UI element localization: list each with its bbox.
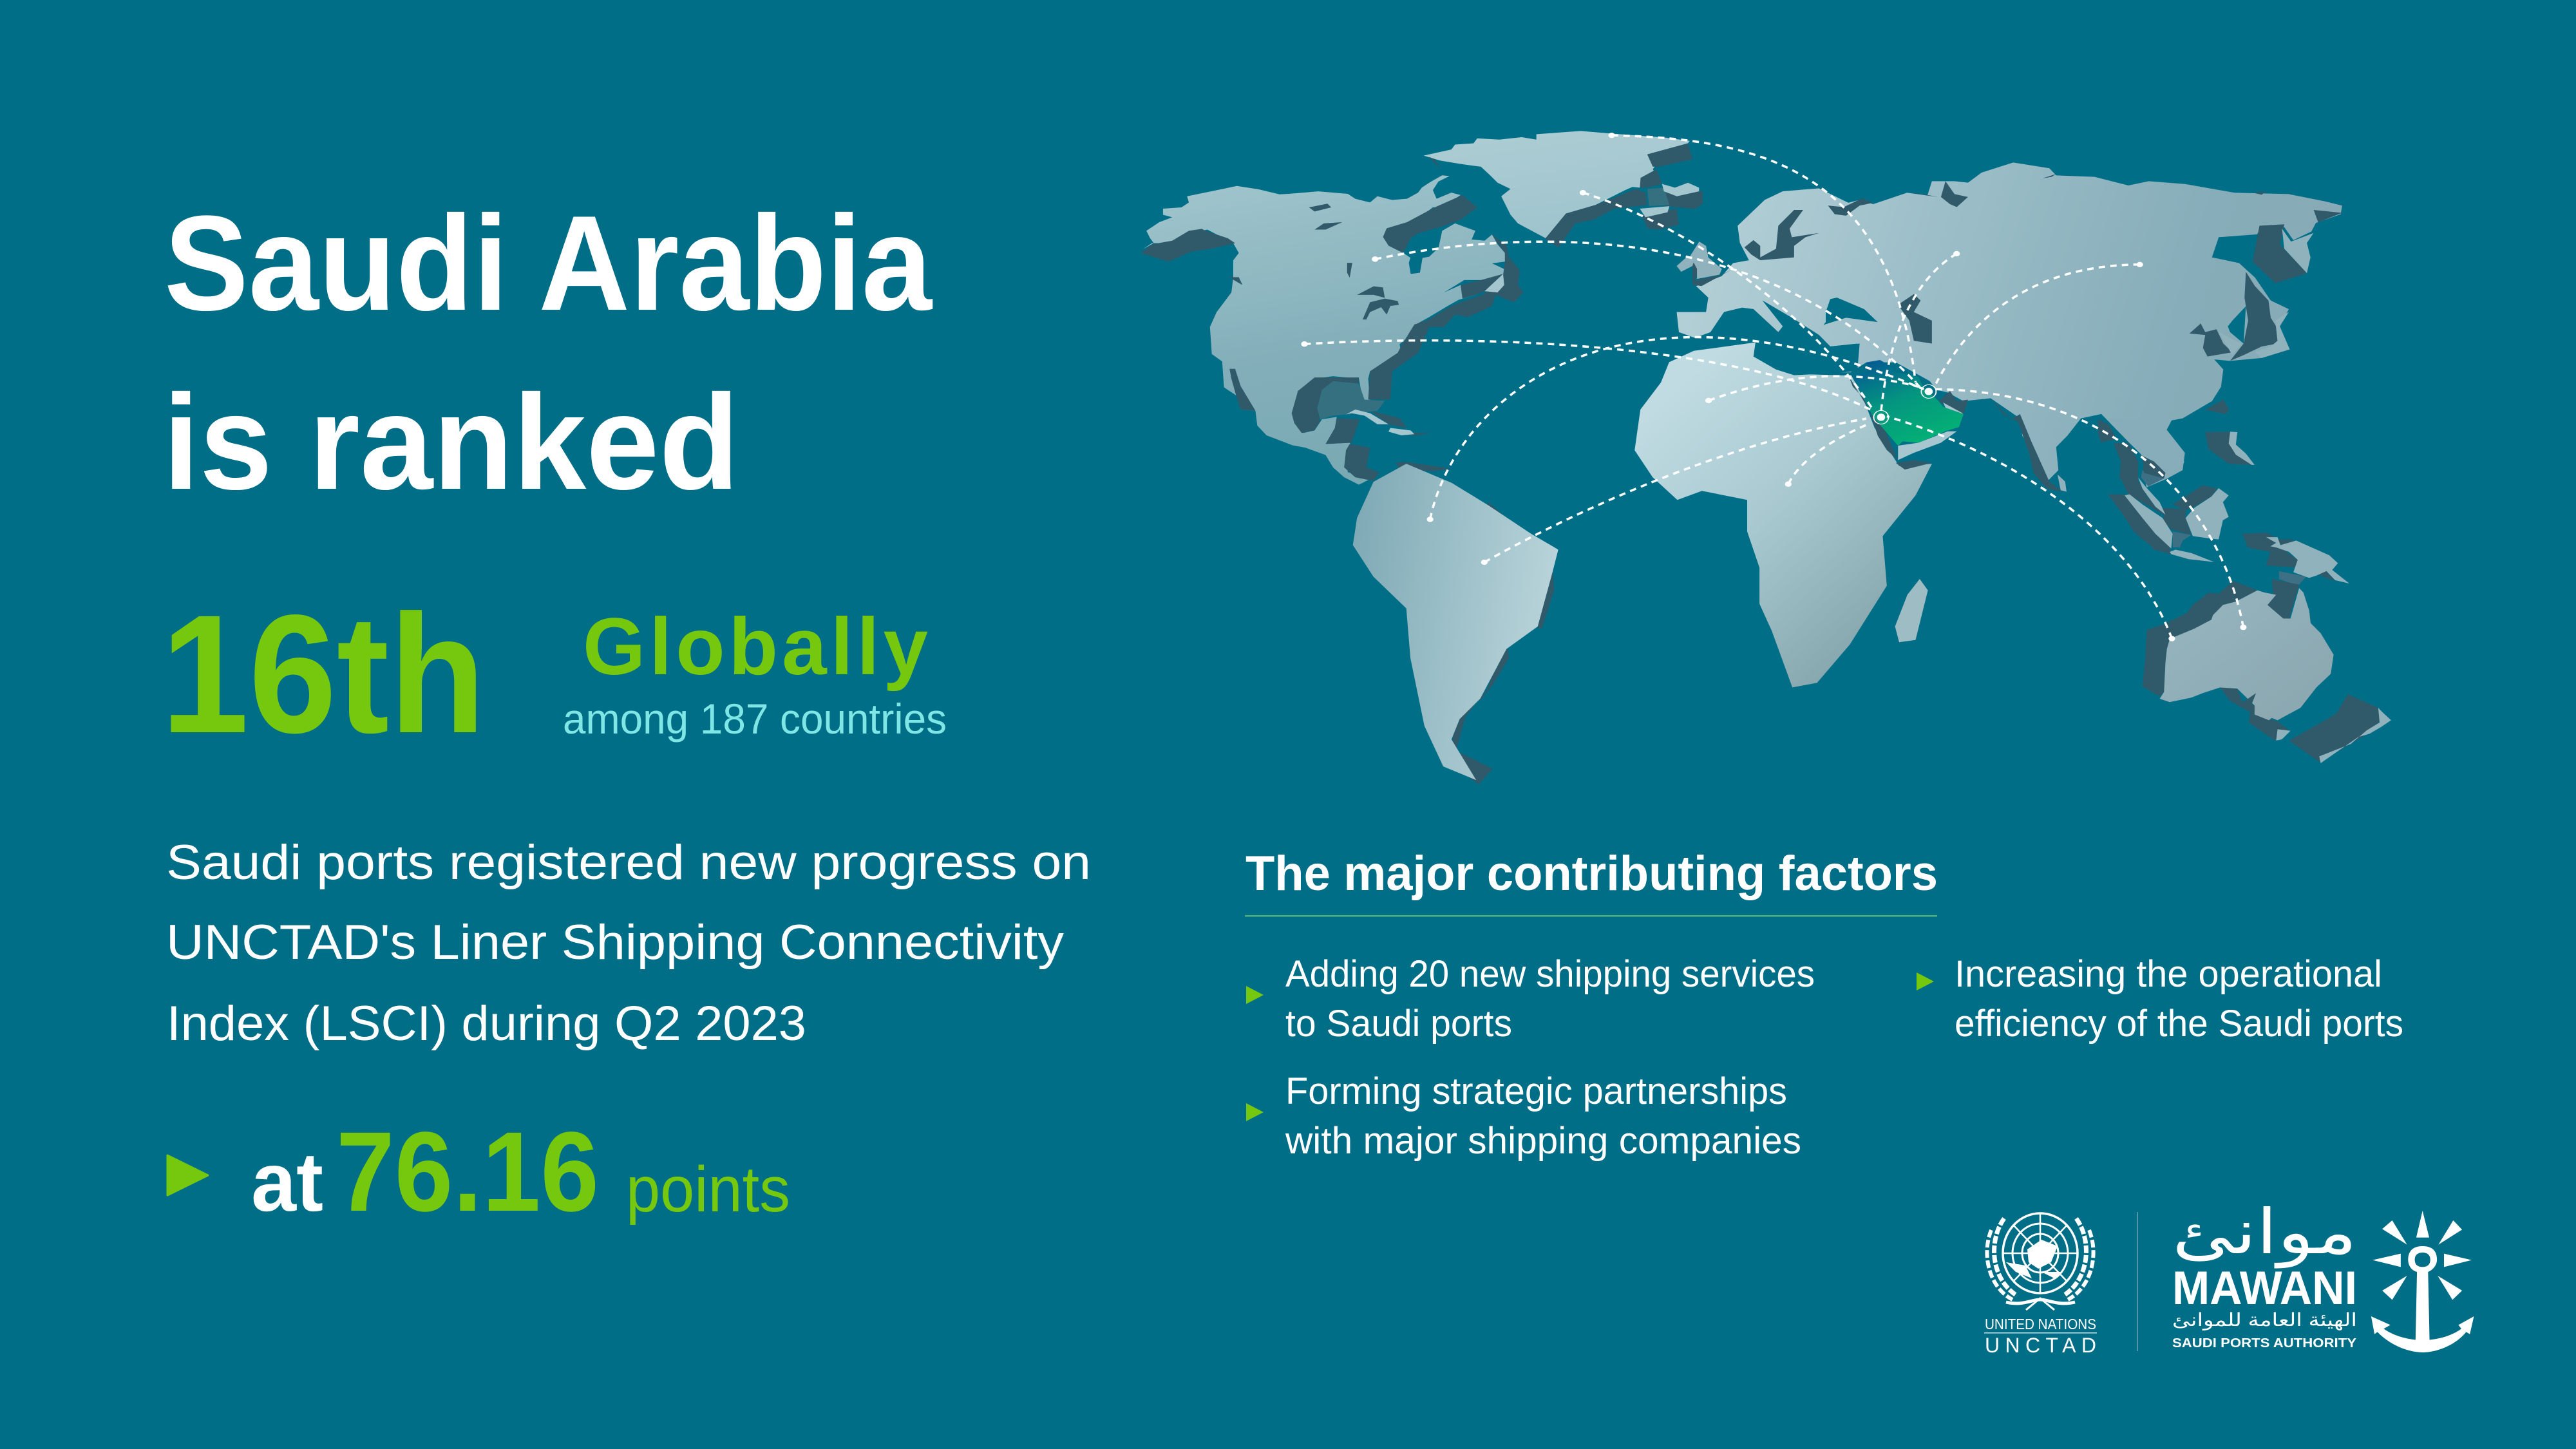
factor: strategic partnerships: with major shipping companies	[1285, 1120, 1801, 1162]
score line	[167, 1109, 790, 1235]
logo: UNCTAD: UNITED NATIONS	[1985, 1316, 2096, 1332]
port hub: jeddah	[1873, 410, 1888, 424]
description paragraph	[166, 835, 1091, 1051]
land: kamchatka, korea, japan, britain	[1677, 229, 2314, 491]
factor: new shipping services	[1246, 953, 1815, 1045]
description paragraph: Index (LSCI) during Q2 2023	[167, 996, 806, 1051]
extrusion shadows: north atlantic and gulf	[1141, 144, 1703, 481]
land: south america	[1353, 464, 1558, 780]
sea of okhotsk and japan	[2212, 236, 2257, 344]
map region: eurasia	[1677, 162, 2342, 491]
logo: Mawani	[2172, 1198, 2474, 1352]
land: arabia south, kamchatka and islands	[1898, 402, 1963, 460]
land: greenland	[1424, 131, 1690, 238]
globally label: among 187 countries	[563, 695, 947, 743]
land: madagascar	[1895, 579, 1928, 642]
extrusion shadows: south america	[1452, 502, 1554, 784]
map overlay: routes and ports	[1301, 133, 2247, 641]
land: north america	[1142, 175, 1507, 485]
land: africa	[1634, 342, 1932, 687]
land: caribbean islands, iceland	[1346, 183, 1699, 435]
icon: UN emblem	[1987, 1213, 2094, 1310]
logo: Mawani: MAWANI	[2172, 1262, 2357, 1314]
title	[163, 187, 933, 518]
globally label: Globally	[583, 602, 928, 692]
map region: south east asia and oceania	[2098, 419, 2391, 763]
logo: Mawani: SAUDI PORTS AUTHORITY	[2172, 1336, 2357, 1350]
extrusion shadows: asia	[1692, 174, 2342, 491]
icon: arrow marker	[167, 1155, 208, 1195]
shipping routes	[1305, 135, 2243, 639]
score line: at	[251, 1135, 323, 1229]
description paragraph: Saudi ports registered new progress on	[166, 835, 1091, 890]
factor: strategic partnerships	[1246, 1070, 1801, 1162]
score line: 76.16	[336, 1109, 599, 1235]
land: australia	[2160, 588, 2334, 720]
score line: points	[626, 1153, 790, 1226]
hudson and james bay	[1403, 223, 1455, 274]
route end points	[1301, 133, 2247, 641]
extrusion shadows: oceania	[2098, 419, 2380, 762]
mediterranean sea	[1688, 301, 1860, 375]
saudi arabia highlight	[1854, 360, 1964, 446]
description paragraph: UNCTAD's Liner Shipping Connectivity	[166, 915, 1064, 970]
factor: operational efficiency	[1917, 953, 2403, 1045]
factor: operational efficiency: efficiency of the Saudi ports	[1955, 1003, 2403, 1045]
logo divider	[2137, 1212, 2138, 1351]
factors heading: The major contributing factors	[1245, 846, 1938, 901]
factor: new shipping services: to Saudi ports	[1285, 1003, 1512, 1045]
black sea	[1823, 298, 1878, 325]
map region: the americas and greenland	[1141, 131, 1703, 485]
logo: Mawani: الهيئة العامة للموانئ	[2172, 1310, 2357, 1331]
port hub: dammam	[1921, 384, 1936, 398]
logo: Mawani: موانئ	[2172, 1198, 2357, 1269]
land: eurasia	[1677, 162, 2342, 488]
factor: strategic partnerships: Forming strategic partnerships	[1285, 1070, 1787, 1112]
spencer gulf	[2243, 693, 2256, 705]
title: is ranked	[163, 366, 739, 518]
logo: UNCTAD	[1984, 1213, 2097, 1357]
gulf of mexico water shade	[1317, 187, 1669, 419]
rank figure: 16th	[161, 580, 486, 768]
factor: new shipping services: Adding 20 new shipping services	[1285, 953, 1815, 995]
logo: UNCTAD: UNCTAD	[1985, 1334, 2096, 1357]
title: Saudi Arabia	[164, 187, 933, 339]
globally label	[563, 602, 947, 743]
land: indochina	[2108, 419, 2184, 478]
world map	[1141, 131, 2391, 784]
shallow sea shade	[2141, 471, 2306, 586]
icon: anchor with rays	[2371, 1211, 2474, 1352]
inland lakes	[1229, 204, 1399, 319]
factor: operational efficiency: Increasing the operational	[1955, 953, 2382, 995]
land: islands of south east asia and new zealand	[2125, 431, 2391, 763]
map region: africa and south america	[1353, 342, 1932, 784]
